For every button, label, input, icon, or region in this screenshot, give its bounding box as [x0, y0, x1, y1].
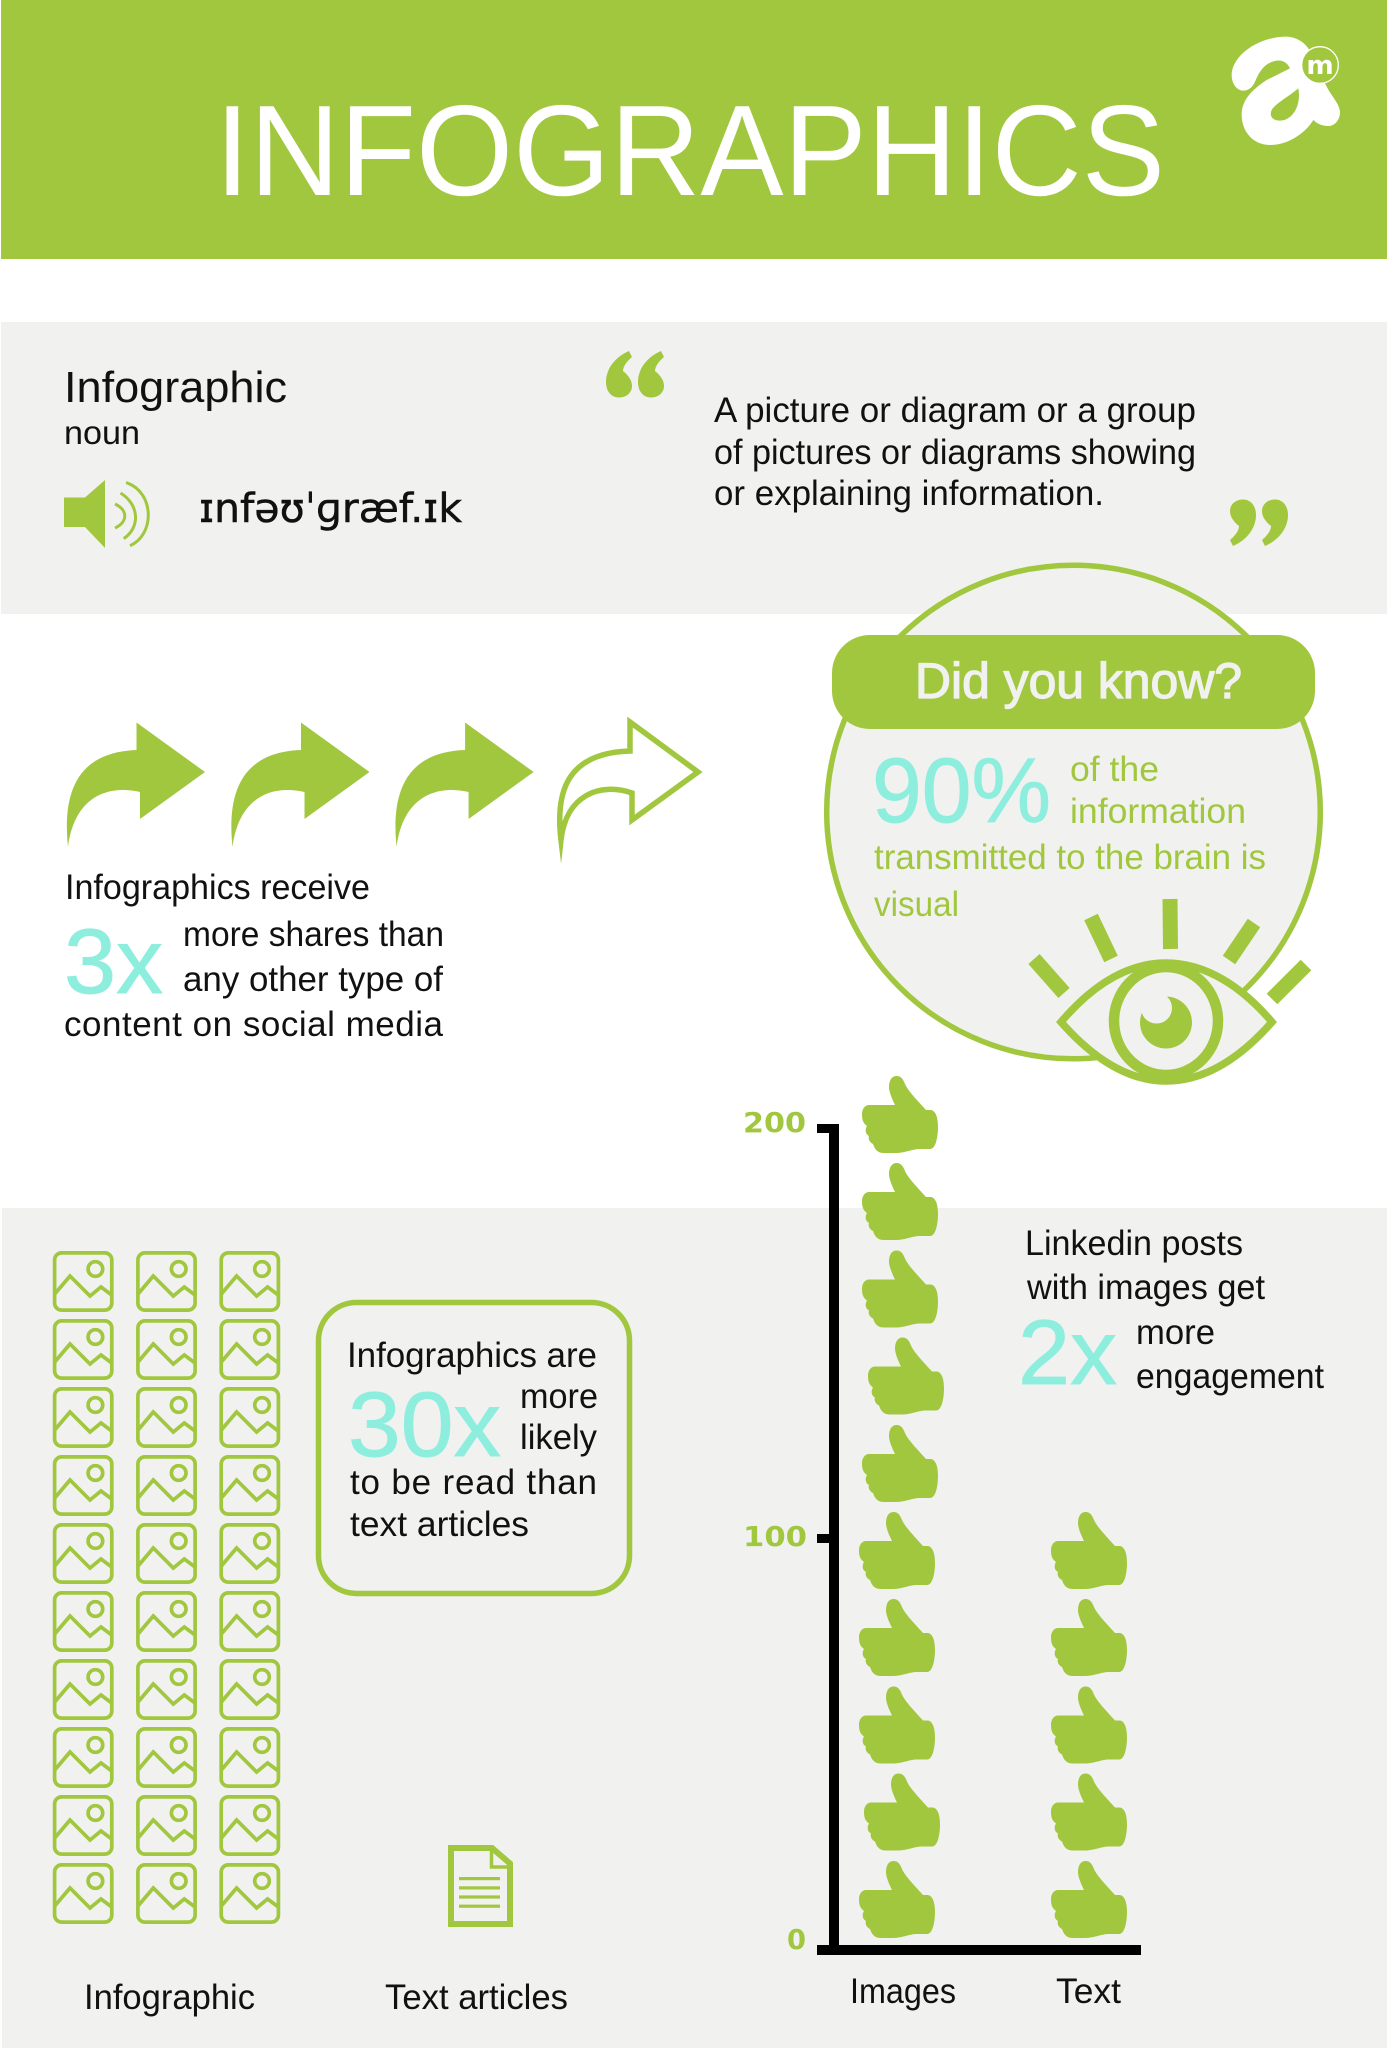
text: shares: more shares than: [183, 915, 444, 954]
icon: closing quote: [1230, 500, 1288, 546]
callout: 30x: [318, 1302, 630, 1594]
icon: eye with rays: [1034, 899, 1306, 1081]
text: shares: [64, 868, 444, 1044]
pronunciation: ɪnfəʊˈɡræf.ɪk: [199, 486, 463, 532]
label: Text articles: Text articles: [385, 1978, 568, 2017]
label: Infographic: Infographic: [84, 1978, 255, 2017]
stat: 2x: 2x: [1018, 1302, 1117, 1404]
header banner: [1, 0, 1387, 259]
icon: document: [451, 1846, 511, 1924]
circle: [827, 565, 1320, 1059]
panel: did you know: [827, 565, 1320, 1081]
panel: definition: [1, 322, 1387, 614]
text: fact: of the: [1070, 750, 1159, 789]
text: fact: visual: [874, 885, 959, 924]
text: fact: transmitted to the brain is: [874, 838, 1266, 877]
stat: 3x: 3x: [64, 911, 163, 1013]
banner heading: Did you know?: [915, 653, 1242, 709]
stat: 90%: 90%: [872, 740, 1051, 842]
panel: shares stat: [64, 722, 698, 1044]
thumbs: text column: [1051, 1512, 1127, 1938]
definition text: A picture or diagram or a group: [714, 391, 1196, 430]
text: linkedin stat: [1018, 1224, 1324, 1404]
text: fact: [874, 750, 1266, 924]
definition text: or explaining information.: [714, 474, 1104, 513]
banner: [832, 635, 1315, 729]
image icons grid: [55, 1253, 278, 1922]
axis numbers: 200: [743, 1106, 806, 1139]
icon: opening quote: [606, 351, 664, 398]
word class: noun: noun: [64, 414, 140, 451]
text: linkedin stat: engagement: [1136, 1357, 1324, 1396]
thumbs: images column: [859, 1076, 944, 1938]
definition text: of pictures or diagrams showing: [714, 433, 1196, 472]
bar chart: thumbs: [743, 1076, 1141, 2011]
axis numbers: 0: [787, 1923, 806, 1956]
share arrows: [67, 722, 698, 847]
label: Images: Images: [850, 1972, 956, 2011]
heading: Infographic: Infographic: [64, 363, 287, 412]
callout: 30x: more: [520, 1377, 598, 1416]
text: linkedin stat: with images get: [1026, 1268, 1265, 1307]
stat: 30x: 30x: [348, 1374, 501, 1476]
text: fact: information: [1070, 792, 1246, 831]
label: Text: Text: [1056, 1972, 1121, 2011]
callout: 30x: to be read than: [350, 1463, 597, 1502]
axis numbers: [743, 1106, 807, 1956]
icon: speaker: [64, 480, 148, 548]
text: shares: Infographics receive: [65, 868, 370, 907]
text: shares: any other type of: [183, 960, 443, 999]
title: INFOGRAPHICS: [215, 79, 1165, 223]
icon: am logo: [1232, 37, 1340, 145]
panel: bottom background: [2, 1208, 1387, 2048]
y axis and ticks: [817, 1124, 1141, 1955]
panel: read likelihood: [55, 1253, 630, 2017]
icon: am logo: m: [1306, 51, 1334, 81]
text: shares: content on social media: [64, 1005, 444, 1044]
text: linkedin stat: more: [1136, 1313, 1215, 1352]
text: linkedin stat: Linkedin posts: [1025, 1224, 1243, 1263]
callout: 30x: text articles: [350, 1505, 529, 1544]
definition text: [714, 391, 1196, 513]
callout: 30x: likely: [520, 1418, 597, 1457]
callout: 30x: Infographics are: [347, 1336, 597, 1375]
axis numbers: 100: [743, 1520, 807, 1553]
